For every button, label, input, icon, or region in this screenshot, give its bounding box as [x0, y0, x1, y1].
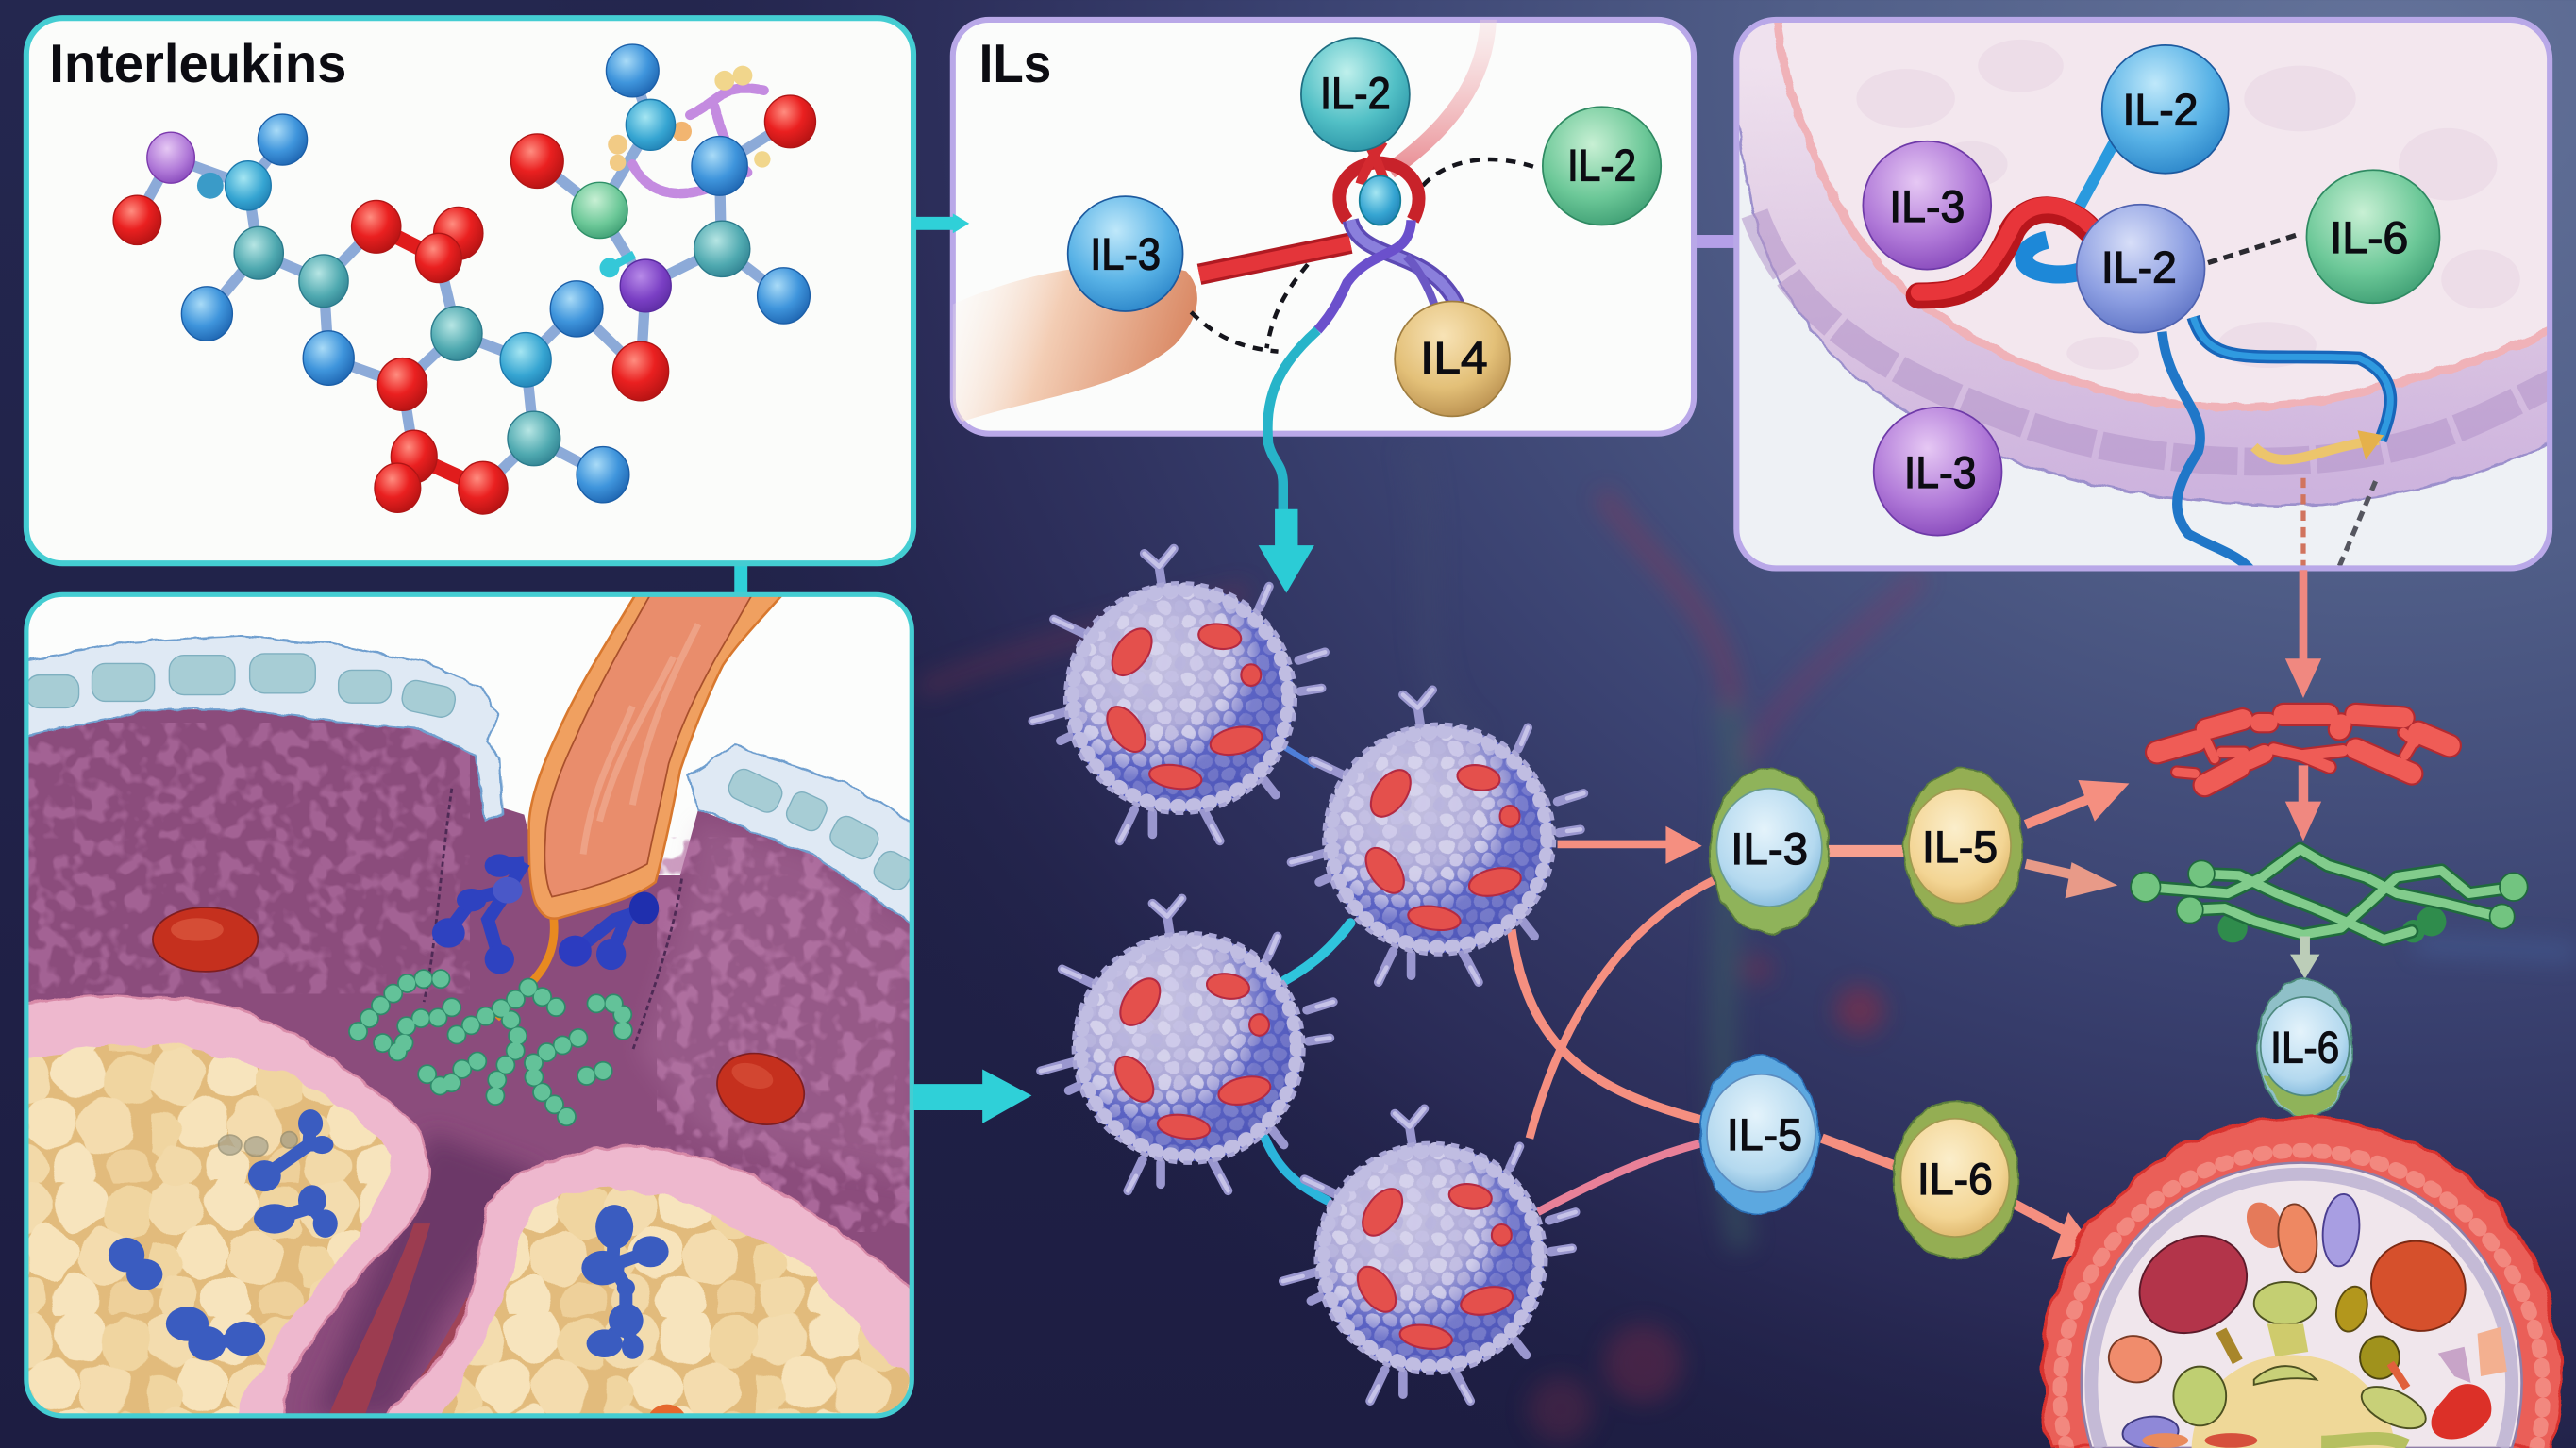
- pod: IL-5 lower: IL-5: [1727, 1109, 1802, 1159]
- salmon pathway lines: [1512, 844, 1714, 1212]
- sphere: IL-2 periwinkle: IL-2: [2101, 242, 2177, 292]
- cell links: [1265, 747, 1350, 1201]
- orange fragment: [647, 1405, 687, 1440]
- sphere: IL-3 purple upper: [1863, 141, 1991, 270]
- cytoplasm: [2082, 1163, 2522, 1448]
- arrowhead to IL-3: [1665, 826, 1702, 864]
- sphere: IL-3 purple upper: IL-3: [1889, 181, 1965, 231]
- immune cell 3: [1041, 898, 1333, 1190]
- blue globule clusters: [109, 1109, 669, 1361]
- sphere: IL-2 teal: [1301, 38, 1410, 151]
- big target cell: [2042, 1118, 2561, 1448]
- pod: IL-5 upper: IL-5: [1922, 822, 1998, 872]
- dashed links: [1191, 159, 1536, 352]
- surface epithelium right: [689, 745, 920, 929]
- pod: IL-6 lower: [1894, 1101, 2018, 1259]
- red receptor ring and tube: [1199, 141, 1457, 512]
- vessel tube: [496, 591, 785, 1019]
- arrow: tissue to immune cells: [913, 1069, 1031, 1123]
- pod: IL-6 lower: IL-6: [1917, 1154, 1993, 1204]
- sphere: IL-2 periwinkle: [2077, 205, 2205, 333]
- membrane band: [1735, 13, 2556, 505]
- red blood cells: [153, 907, 813, 1136]
- panel: molecule: [26, 18, 913, 563]
- teal stem: [1267, 330, 1317, 512]
- organelles: [2103, 1192, 2507, 1448]
- title: ILs: ILs: [979, 34, 1051, 94]
- arrow: red fibres to green fibres: [2285, 765, 2321, 841]
- sphere: IL-3: IL-3: [1090, 229, 1161, 279]
- sphere: IL-2 blue: [2102, 45, 2229, 174]
- panel: tissue membrane close-up: [1735, 13, 2556, 574]
- sphere: IL-2 teal: IL-2: [1320, 68, 1391, 118]
- sphere: IL4: IL4: [1420, 332, 1488, 382]
- pod connector lines and arrows: [1822, 780, 2129, 1259]
- immune cell 2: [1291, 690, 1583, 982]
- purple strands: [1350, 220, 1457, 306]
- accent side chain: [599, 66, 771, 277]
- sphere: IL-6 green: [2306, 170, 2439, 303]
- pod: IL-6 small: [2257, 979, 2352, 1117]
- surface epithelium left: [16, 636, 503, 822]
- pod: IL-6 small: IL-6: [2270, 1023, 2339, 1073]
- pod: IL-5 lower: [1700, 1057, 1818, 1214]
- sphere: IL-3 purple lower: IL-3: [1904, 447, 1977, 497]
- dashed links: [2208, 235, 2376, 570]
- sphere: IL-6 green: IL-6: [2330, 212, 2408, 262]
- arrow: green fibres to IL-6: [2290, 936, 2319, 979]
- title: Interleukins: Interleukins: [49, 34, 346, 94]
- connector: panel 1 to panel 2: [912, 213, 969, 233]
- red fibre network: [2157, 714, 2450, 785]
- dark blue clusters: [432, 854, 659, 974]
- red S tube: [1919, 209, 2090, 295]
- connective tissue: [16, 709, 920, 1429]
- fat lobule left: [16, 996, 429, 1429]
- connector: panel 1 to panel 4: [734, 561, 747, 598]
- sphere: IL-3: [1068, 196, 1183, 311]
- fat lobule right: [370, 1146, 920, 1429]
- arrow: panel 3 down to red fibres: [2285, 570, 2321, 698]
- panel: ILs receptor diagram: [936, 16, 1694, 512]
- pod: IL-3: [1710, 769, 1829, 933]
- pod: IL-3: IL-3: [1731, 824, 1808, 874]
- pod: IL-5 upper: [1904, 769, 2022, 926]
- blue wires: [2024, 115, 2390, 574]
- nucleus area: [2192, 1355, 2395, 1448]
- molecule atoms: [113, 44, 815, 514]
- cell wall: [2042, 1118, 2561, 1448]
- molecule bonds: [137, 71, 790, 488]
- sphere: IL-2 green: [1543, 107, 1661, 225]
- green fibre network: [2131, 849, 2528, 942]
- sphere: IL-2 blue: IL-2: [2122, 84, 2199, 134]
- gold arrow: [2254, 441, 2379, 459]
- sphere: IL4: [1395, 302, 1510, 416]
- immune cell 4: [1283, 1108, 1576, 1401]
- arrow: ILs panel to immune cells: [1259, 509, 1314, 593]
- inner tissue: [1776, 13, 2556, 408]
- pink strand: [1390, 16, 1488, 171]
- panel: tissue cross-section: [16, 591, 920, 1440]
- finger-shaped cell: [953, 270, 1197, 422]
- sphere: IL-2 green: IL-2: [1567, 141, 1636, 191]
- membrane cells: [1754, 213, 2556, 461]
- sphere: IL-3 purple lower: [1874, 408, 2001, 536]
- connector: panel 2 to panel 3: [1692, 235, 1738, 248]
- immune cell 1: [1032, 549, 1325, 841]
- green bead chains: [359, 979, 626, 1119]
